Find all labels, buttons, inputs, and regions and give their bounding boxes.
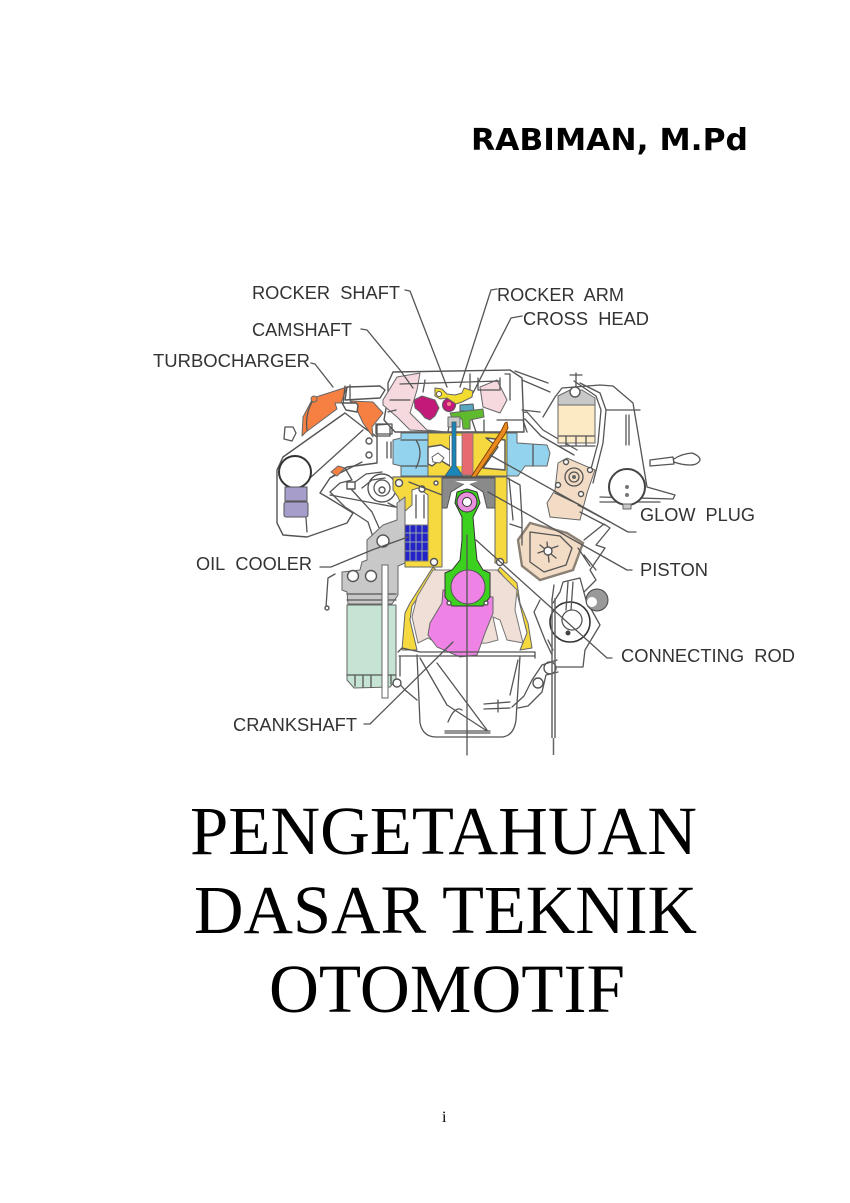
leader lines bbox=[311, 289, 636, 724]
connecting rod bbox=[445, 489, 490, 606]
label: glow plug: GLOW PLUG bbox=[640, 505, 755, 525]
title bbox=[190, 793, 697, 1027]
alternator bbox=[534, 578, 608, 667]
fuel tube bbox=[500, 412, 577, 455]
filter support rod bbox=[382, 565, 388, 698]
label: cross head: CROSS HEAD bbox=[523, 309, 649, 329]
lower pump bbox=[518, 523, 583, 580]
piston bbox=[442, 478, 495, 508]
accessory hardware bbox=[578, 524, 610, 592]
oil cooler bbox=[405, 525, 428, 561]
valve spring retainer bbox=[448, 417, 460, 427]
head openings bbox=[428, 436, 505, 470]
cylinder block bbox=[393, 477, 522, 567]
upper pump bbox=[547, 458, 610, 525]
label: connecting rod: CONNECTING ROD bbox=[621, 646, 795, 666]
manifold flange bolts bbox=[284, 424, 391, 458]
exhaust pipes and elbow bbox=[330, 468, 398, 552]
exhaust manifold bbox=[277, 413, 377, 537]
piston crown cutout bbox=[455, 481, 478, 485]
oil pan bbox=[393, 535, 535, 755]
round tank bbox=[609, 469, 645, 509]
title: DASAR TEKNIK bbox=[194, 872, 697, 948]
turbo outlet flange bbox=[284, 487, 308, 517]
cooling curl bracket bbox=[512, 640, 558, 708]
title: PENGETAHUAN bbox=[190, 793, 697, 869]
cylinder head bbox=[428, 433, 507, 476]
label: piston: PISTON bbox=[640, 560, 708, 580]
rocker arm bbox=[435, 388, 473, 404]
engine diagram bbox=[153, 283, 795, 755]
oil filter head bbox=[325, 497, 405, 610]
injector bbox=[462, 433, 473, 475]
cross head bbox=[450, 404, 484, 429]
engine mount bracket bbox=[515, 371, 675, 502]
oil filter canister bbox=[347, 594, 396, 688]
label: crankshaft: CRANKSHAFT bbox=[233, 715, 357, 735]
drain plug handle bbox=[650, 453, 700, 466]
turbocharger housing bbox=[302, 387, 383, 476]
label: rocker shaft: ROCKER SHAFT bbox=[252, 283, 400, 303]
label: camshaft: CAMSHAFT bbox=[252, 320, 352, 340]
label: rocker arm: ROCKER ARM bbox=[497, 285, 624, 305]
head gasket line bbox=[393, 476, 507, 478]
label: oil cooler: OIL COOLER bbox=[196, 554, 312, 574]
skirt right bbox=[498, 567, 532, 650]
label: turbocharger: TURBOCHARGER bbox=[153, 351, 310, 371]
camshaft lobes bbox=[414, 396, 456, 420]
exhaust outlet circle bbox=[279, 456, 311, 488]
crankshaft bbox=[428, 590, 493, 657]
blue cylinder head ports bbox=[393, 433, 550, 476]
page number: i bbox=[442, 1109, 447, 1126]
crankcase bbox=[412, 570, 523, 645]
turbo compressor tube bbox=[342, 385, 385, 412]
title: OTOMOTIF bbox=[269, 951, 625, 1027]
glow plug bbox=[471, 422, 508, 478]
cylinder head cover bbox=[376, 370, 540, 434]
skirt left bbox=[402, 567, 436, 650]
author name: RABIMAN, M.Pd bbox=[471, 123, 748, 158]
dipstick bbox=[552, 598, 555, 755]
intake valve bbox=[445, 422, 463, 476]
fuel filter bbox=[558, 373, 595, 446]
